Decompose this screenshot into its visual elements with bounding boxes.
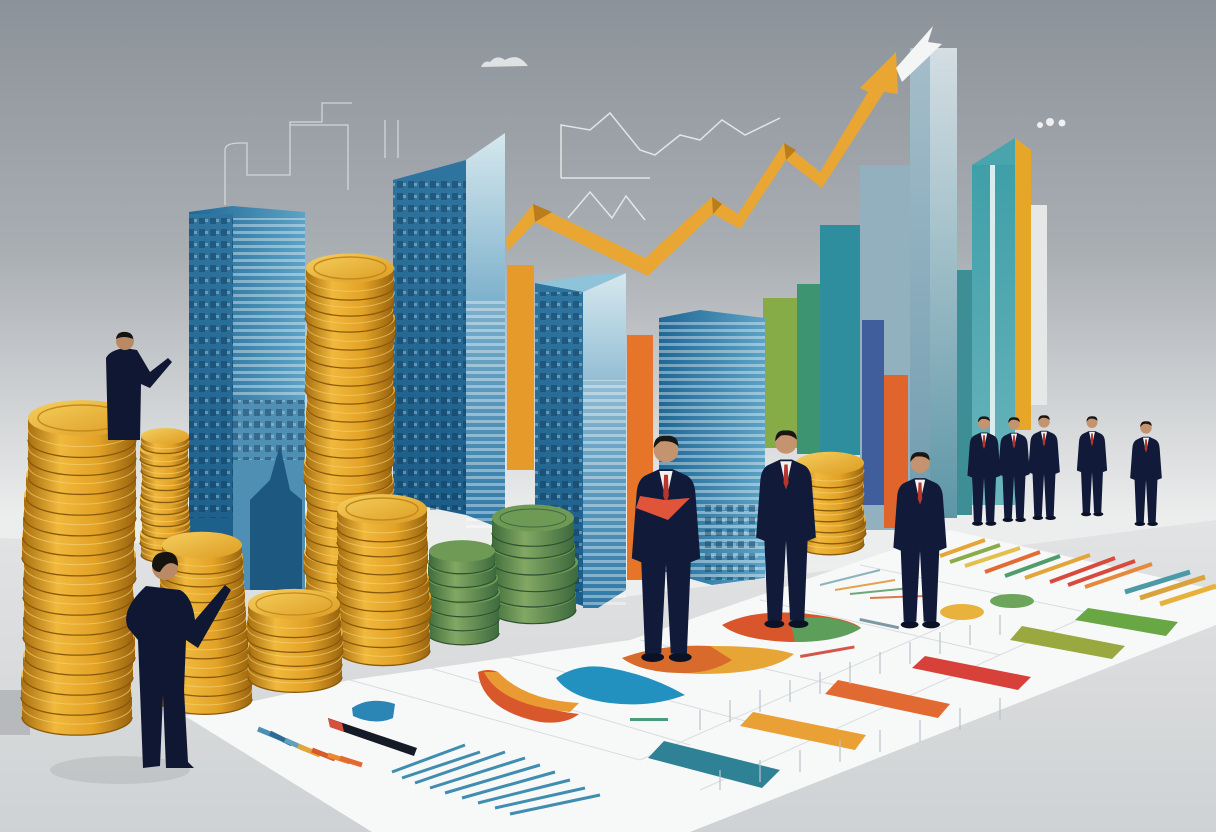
person on coin stack bbox=[106, 332, 172, 440]
label bar: red bbox=[912, 656, 1031, 690]
striped chart far right bbox=[1125, 572, 1216, 604]
striped chart center bbox=[820, 570, 925, 598]
label bar: teal bbox=[648, 741, 780, 788]
floor shadow left bbox=[0, 690, 30, 735]
coin stack: back right bbox=[794, 452, 866, 555]
paper grid lines bbox=[350, 565, 1100, 790]
blue cube object bbox=[352, 701, 395, 722]
coin stack: center front bbox=[337, 494, 431, 666]
coin stack: short bbox=[247, 589, 343, 692]
striped chart top right bbox=[940, 540, 1152, 587]
rising arrow bbox=[506, 26, 942, 276]
wireframe skyline sketch center bbox=[561, 113, 780, 220]
coin stack: green front bbox=[427, 540, 500, 645]
floor bbox=[0, 520, 1216, 832]
small cloud right bbox=[1037, 118, 1066, 128]
disc under reader bbox=[622, 646, 794, 674]
pie segment: blue bbox=[556, 666, 685, 704]
pie segment: orange inner bbox=[484, 672, 579, 712]
pen bbox=[328, 718, 417, 756]
person back view pointing bbox=[50, 552, 231, 784]
wireframe skyline sketch left bbox=[225, 103, 398, 205]
group person 2 bbox=[998, 417, 1030, 522]
small bar chart bottom left bbox=[258, 729, 362, 765]
coin stack: large left bbox=[21, 400, 136, 735]
building 4 bbox=[659, 310, 765, 585]
label bar: green right bbox=[1075, 608, 1178, 636]
group person 4 bbox=[1077, 416, 1107, 516]
person thinking bbox=[893, 452, 947, 628]
label bar: orange-red bbox=[825, 680, 950, 718]
small pie green bbox=[990, 594, 1034, 608]
person reading bbox=[632, 436, 700, 662]
building 3 bbox=[535, 273, 626, 608]
person standing with papers bbox=[756, 430, 816, 628]
pie segment: red-orange bbox=[478, 670, 579, 723]
coin stack: green back bbox=[490, 504, 578, 624]
group person 5 bbox=[1130, 421, 1162, 526]
disc segment green bbox=[790, 617, 861, 642]
bar chart skyline bbox=[507, 48, 1047, 580]
open book bbox=[636, 496, 690, 520]
label bar: orange bbox=[740, 712, 866, 750]
paper with charts bbox=[185, 530, 1216, 832]
building 1 bbox=[189, 206, 305, 590]
label bar: green bbox=[1010, 626, 1125, 659]
line chart bottom center bbox=[392, 745, 600, 814]
coin stack: tall center bbox=[304, 253, 395, 602]
disc segment left bbox=[622, 646, 732, 673]
grid tick marks bbox=[700, 615, 1000, 790]
coin stack: mid left bbox=[158, 532, 253, 714]
small pie yellow bbox=[940, 604, 984, 620]
group person 1 bbox=[967, 416, 1001, 526]
building 2 bbox=[393, 133, 505, 530]
small pictograms on paper bbox=[630, 618, 899, 721]
disc under standing man bbox=[722, 612, 861, 642]
coin stack: small back left bbox=[140, 428, 190, 563]
small cloud top bbox=[481, 57, 528, 67]
group person 3 bbox=[1028, 415, 1060, 520]
